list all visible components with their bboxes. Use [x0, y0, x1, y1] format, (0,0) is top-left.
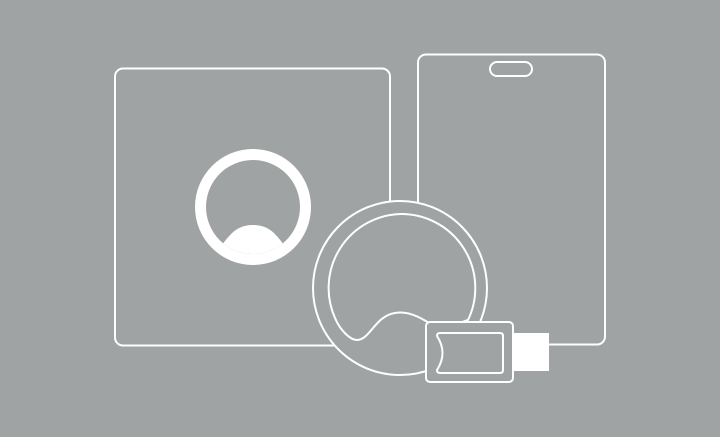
- USB connector: [426, 322, 549, 382]
- illustration: cards and reader: [114, 54, 606, 383]
- round reader: [313, 201, 487, 375]
- badge slot: [490, 62, 532, 76]
- icon: logo ring: [195, 149, 311, 270]
- vertical badge card: [418, 54, 605, 344]
- square card: [115, 68, 390, 346]
